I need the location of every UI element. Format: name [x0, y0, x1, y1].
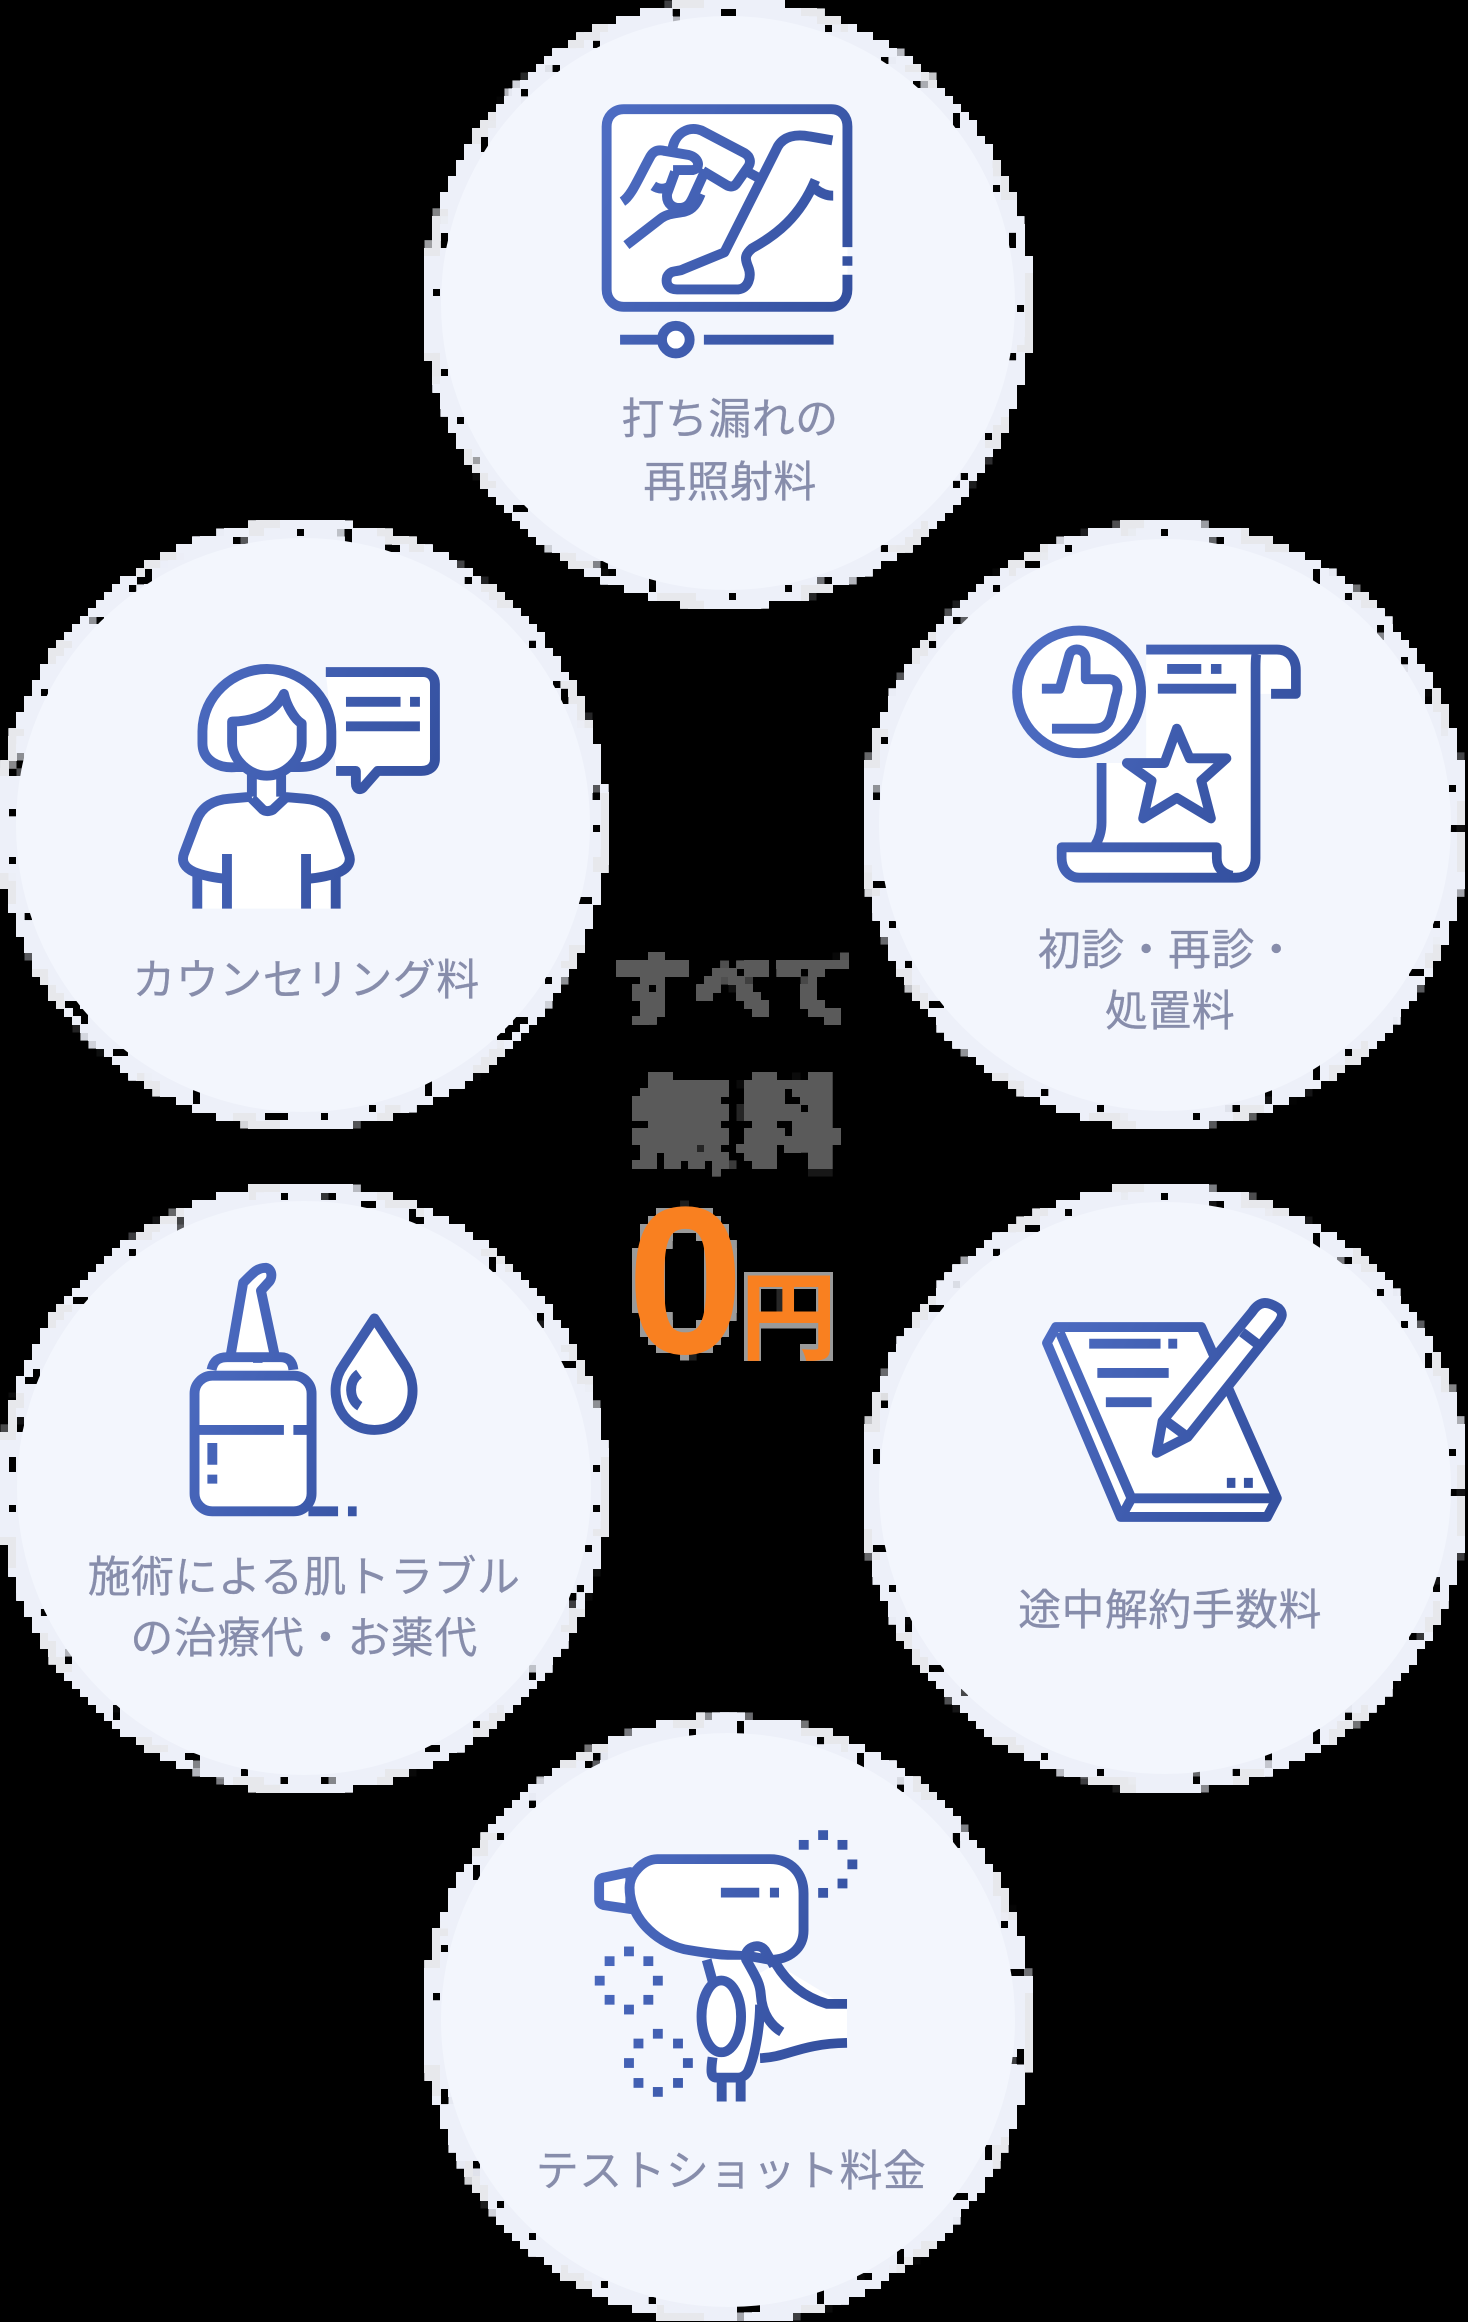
price: 0円: 円: [740, 1264, 837, 1373]
price: 0円: [627, 1163, 837, 1398]
label: テストショット料金: テストショット料金: [536, 2148, 926, 2196]
center heading: すべて無料: [612, 946, 861, 1182]
label: 打ち漏れの再照射料: 再照射料: [643, 459, 817, 507]
icon: laser hair removal device in hand: [595, 1830, 857, 2101]
icon: sparkle dots: [595, 1830, 857, 2097]
icon: counselor with speech bubble: [183, 669, 435, 909]
price: 0円: 0: [627, 1163, 744, 1398]
icon: notebook and pencil: [1047, 1303, 1282, 1517]
panel: 初診・再診・処置料: [862, 522, 1468, 1128]
price: 0円: 0: [627, 1163, 744, 1398]
center heading: すべて無料: すべて: [612, 946, 861, 1035]
label: 初診・再診・処置料: 初診・再診・: [1038, 927, 1298, 975]
label: 途中解約手数料: 途中解約手数料: [1018, 1587, 1322, 1635]
label: 初診・再診・処置料: 処置料: [1105, 988, 1235, 1036]
label: カウンセリング料: カウンセリング料: [132, 957, 480, 1005]
icon: laser on leg monitor: [607, 109, 847, 353]
label: 施術による肌トラブルの治療代・お薬代: の治療代・お薬代: [130, 1615, 478, 1663]
panel: テストショット料金: [424, 1716, 1032, 2322]
label: 施術による肌トラブルの治療代・お薬代: 施術による肌トラブル: [88, 1554, 520, 1602]
panel: カウンセリング料: [0, 521, 607, 1129]
panel: 施術による肌トラブルの治療代・お薬代: [0, 1184, 608, 1792]
panel: 打ち漏れの再照射料: [424, 0, 1032, 607]
icon: review scroll with thumbs up and star: [1017, 631, 1296, 878]
panel: 途中解約手数料: [862, 1185, 1468, 1791]
icon: medicine bottle and drop: [195, 1268, 413, 1511]
price: 0円: 円: [740, 1264, 837, 1373]
center heading: すべて無料: 無料: [632, 1070, 848, 1182]
label: 打ち漏れの再照射料: 打ち漏れの: [622, 396, 838, 444]
